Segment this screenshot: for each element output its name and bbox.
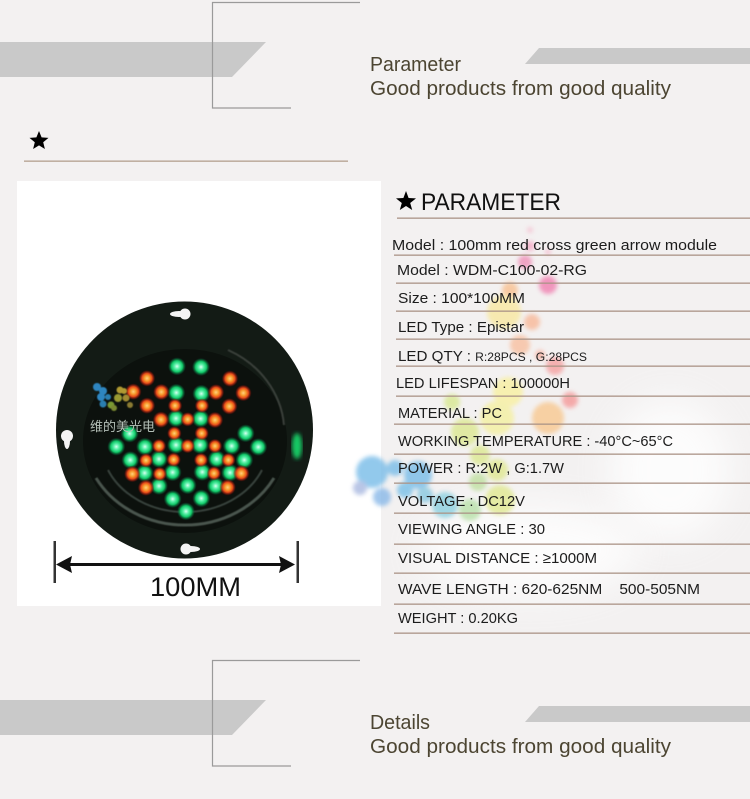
parameter rows bbox=[392, 237, 717, 627]
bottom section banner: Details bbox=[370, 712, 430, 734]
top section banner bbox=[0, 2, 750, 108]
red LEDs bbox=[124, 370, 252, 496]
background watermark bbox=[353, 227, 730, 595]
parameter rows: LED Type : Epistar bbox=[398, 319, 524, 336]
bottom section banner bbox=[0, 660, 750, 766]
dimension arrow bbox=[54, 541, 299, 583]
top section banner: Good products from good quality bbox=[370, 78, 671, 100]
parameter rows: LED QTY : R:28PCS , G:28PCS bbox=[398, 348, 587, 365]
parameter rows: Size : 100*100MM bbox=[398, 290, 525, 307]
parameter rows: VIEWING ANGLE : 30 bbox=[398, 521, 545, 538]
panel: product photo bbox=[17, 181, 381, 606]
parameter rows: LED LIFESPAN : 100000H bbox=[396, 375, 570, 392]
top section banner: Parameter bbox=[370, 54, 461, 76]
parameter rows: VISUAL DISTANCE : ≥1000M bbox=[398, 550, 597, 567]
star heading with rule bbox=[24, 131, 348, 162]
row rules bbox=[394, 218, 750, 634]
panel: parameter list bbox=[353, 189, 750, 634]
parameter rows: MATERIAL : PC bbox=[398, 405, 502, 422]
icon: LED module disc bbox=[56, 302, 313, 558]
icon: LED module disc: 维的美光电 bbox=[90, 419, 155, 434]
parameter rows: WEIGHT : 0.20KG bbox=[398, 610, 518, 627]
green LEDs bbox=[107, 357, 267, 520]
dimension label: 100MM bbox=[150, 572, 241, 602]
green reflection bbox=[292, 433, 302, 459]
parameter rows: WORKING TEMPERATURE : -40°C~65°C bbox=[398, 433, 673, 450]
bottom section banner: Good products from good quality bbox=[370, 736, 671, 758]
parameter rows: Model : 100mm red cross green arrow module bbox=[392, 237, 717, 254]
watermark logo on disc bbox=[93, 383, 133, 411]
keyhole slots bbox=[61, 308, 200, 554]
heading: PARAMETER: PARAMETER bbox=[421, 189, 561, 216]
parameter rows: Model : WDM-C100-02-RG bbox=[397, 262, 587, 279]
parameter rows: POWER : R:2W , G:1.7W bbox=[398, 460, 565, 477]
parameter rows: WAVE LENGTH : 620-625NM 500-505NM bbox=[398, 581, 700, 598]
parameter rows: VOLTAGE : DC12V bbox=[398, 493, 525, 510]
